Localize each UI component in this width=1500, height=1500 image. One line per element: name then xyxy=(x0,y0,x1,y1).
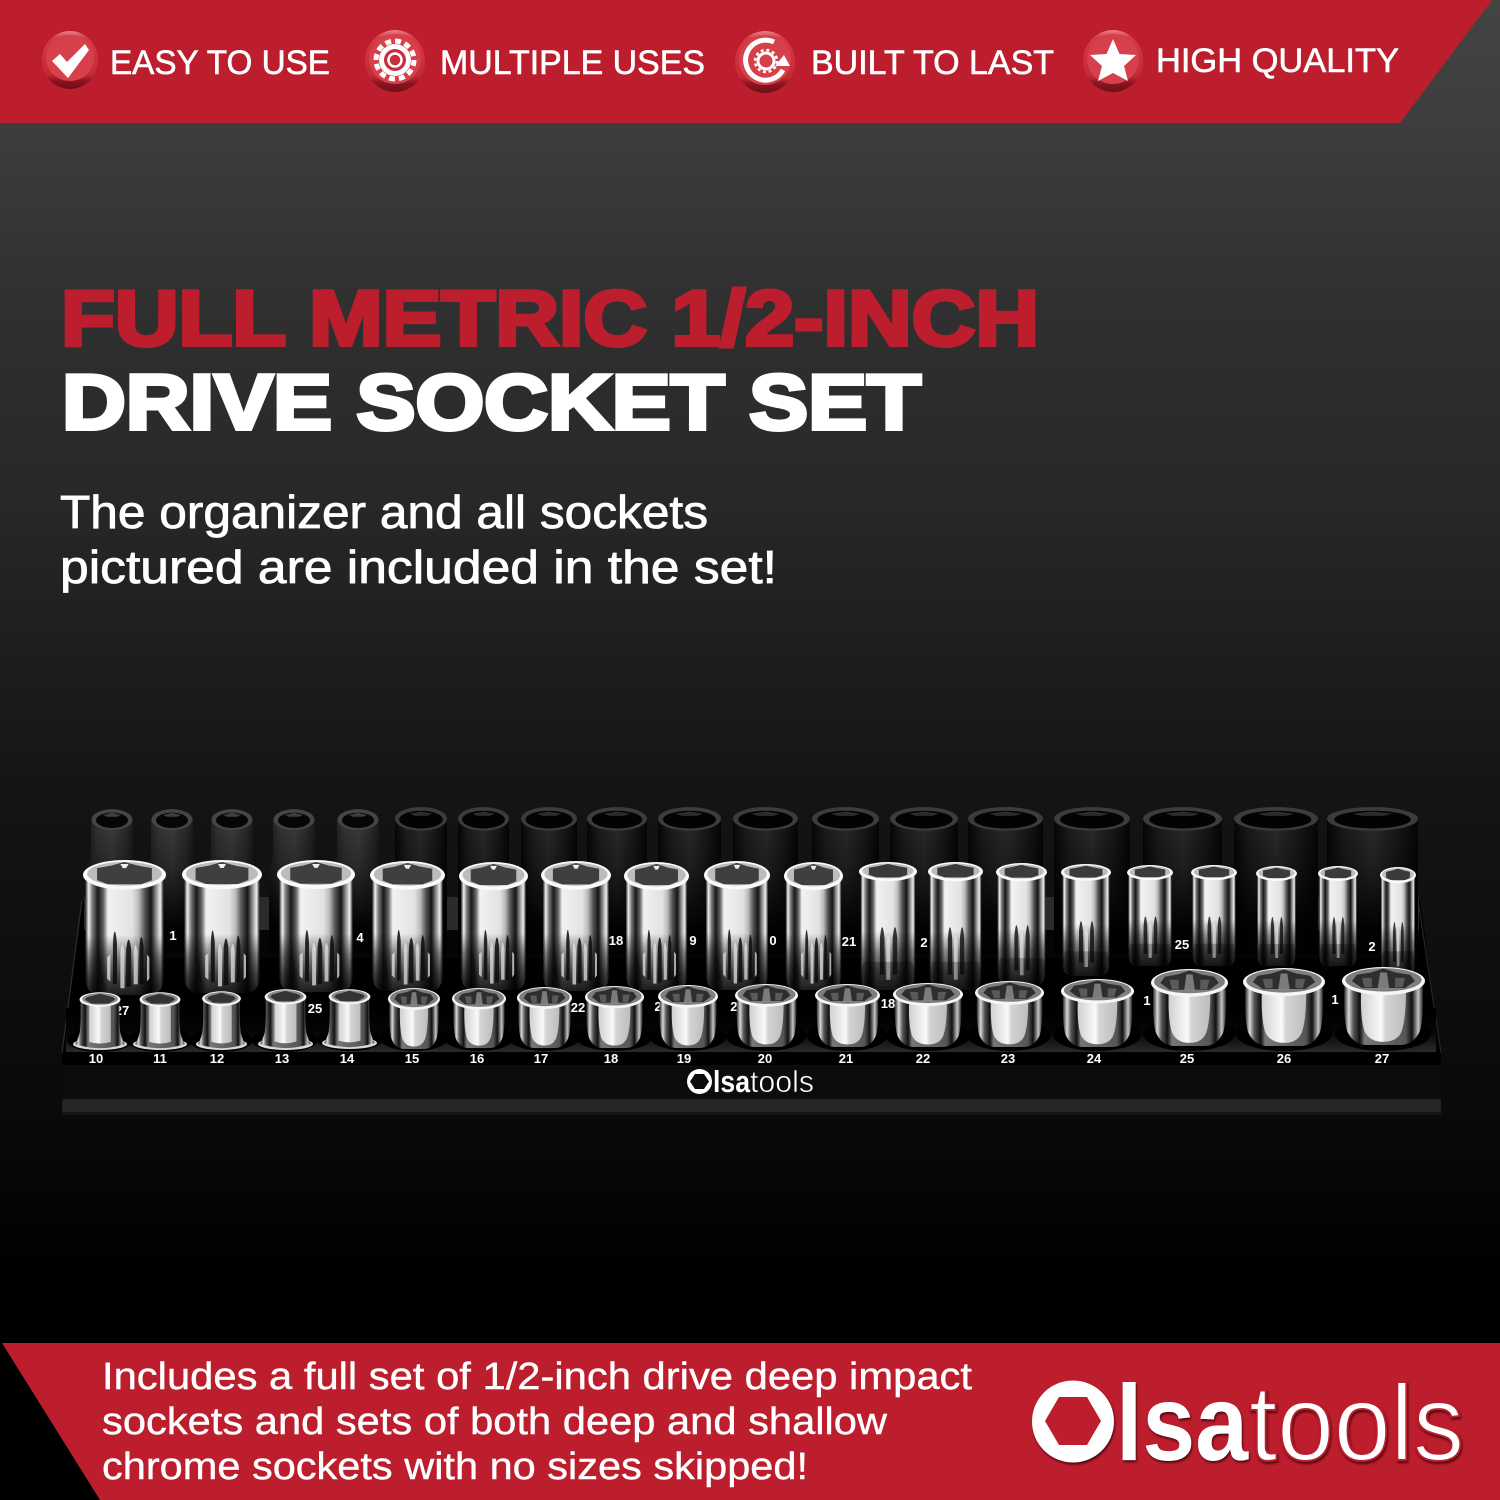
logo: Olsatools: O xyxy=(1046,1382,1100,1467)
size numbers on tray xyxy=(89,1051,1389,1066)
feature: high quality: HIGH QUALITY xyxy=(1156,42,1399,80)
tray logo: tools xyxy=(750,1064,814,1099)
size numbers on tray: 20 xyxy=(758,1051,772,1066)
description text: Includes a full set of 1/2-inch drive deep impact xyxy=(102,1356,972,1398)
feature: built to last: BUILT TO LAST xyxy=(811,44,1054,82)
socket holes xyxy=(67,1017,1431,1052)
size numbers on tray: 23 xyxy=(1001,1051,1015,1066)
organizer tray xyxy=(62,897,1441,1115)
size numbers on tray: 22 xyxy=(916,1051,930,1066)
front tier back labels: 22 xyxy=(571,1000,585,1015)
middle tier size labels: 0 xyxy=(769,933,777,948)
size numbers on tray: 11 xyxy=(153,1051,167,1066)
title xyxy=(61,274,1039,446)
front tier back labels: 18 xyxy=(881,996,895,1011)
top banner xyxy=(0,0,1492,123)
size numbers on tray: 12 xyxy=(210,1051,224,1066)
icon: star badge xyxy=(1083,30,1143,92)
icon: check badge xyxy=(42,31,98,89)
middle tier size labels xyxy=(169,928,1376,954)
front tier back labels: 1 xyxy=(1143,993,1151,1008)
title line 2: DRIVE SOCKET SET xyxy=(62,358,921,446)
middle tier size labels: 18 xyxy=(609,933,623,948)
size numbers on tray: 18 xyxy=(604,1051,618,1066)
title line 1: FULL METRIC 1/2-INCH xyxy=(61,274,1039,362)
shallow chrome sockets row xyxy=(73,967,1425,1050)
subtitle text: The organizer and all sockets xyxy=(60,486,708,538)
front tier back labels: 2 xyxy=(654,999,662,1014)
middle tier size labels: 2 xyxy=(1368,939,1376,954)
size numbers on tray: 16 xyxy=(470,1051,484,1066)
logo: Olsatools: lsa xyxy=(1116,1362,1249,1483)
middle tier size labels: 2 xyxy=(920,935,928,950)
tray logo: lsa xyxy=(713,1064,751,1099)
size numbers on tray: 27 xyxy=(1375,1051,1389,1066)
size numbers on tray: 21 xyxy=(839,1051,853,1066)
size numbers on tray: 10 xyxy=(89,1051,103,1066)
logo: Olsatools xyxy=(1032,1362,1464,1483)
middle tier size labels: 25 xyxy=(1175,937,1189,952)
front tier back labels: 27 xyxy=(115,1003,129,1018)
middle tier size labels: 9 xyxy=(689,933,697,948)
logo: Olsatools: tools xyxy=(1249,1362,1464,1483)
size numbers on tray: 19 xyxy=(677,1051,691,1066)
size numbers on tray: 14 xyxy=(340,1051,355,1066)
subtitle text: pictured are included in the set! xyxy=(60,541,777,593)
size numbers on tray: 25 xyxy=(1180,1051,1194,1066)
middle tier size labels: 1 xyxy=(169,928,177,943)
description text: chrome sockets with no sizes skipped! xyxy=(102,1446,808,1488)
middle tier size labels: 21 xyxy=(842,934,856,949)
icon: gear badge xyxy=(365,30,425,92)
deep impact sockets row xyxy=(87,807,1418,955)
tray logo xyxy=(687,1064,814,1099)
bottom banner xyxy=(2,1343,1500,1500)
icon: cycle gear badge xyxy=(735,31,795,93)
subtitle text xyxy=(60,486,777,593)
deep chrome sockets row xyxy=(83,860,1416,995)
front tier back labels: 25 xyxy=(308,1001,322,1016)
feature: multiple uses: MULTIPLE USES xyxy=(440,44,705,82)
front tier back labels: 1 xyxy=(1331,992,1339,1007)
feature: easy to use: EASY TO USE xyxy=(110,44,330,82)
size numbers on tray: 13 xyxy=(275,1051,289,1066)
front tier back labels xyxy=(115,992,1339,1018)
size numbers on tray: 24 xyxy=(1087,1051,1102,1066)
description text xyxy=(102,1356,972,1488)
tray logo: O xyxy=(690,1066,709,1096)
size numbers on tray: 15 xyxy=(405,1051,419,1066)
description text: sockets and sets of both deep and shallow xyxy=(102,1401,888,1443)
middle tier size labels: 4 xyxy=(356,930,364,945)
front tier back labels: 2 xyxy=(730,999,738,1014)
size numbers on tray: 26 xyxy=(1277,1051,1291,1066)
size numbers on tray: 17 xyxy=(534,1051,548,1066)
socket organizer with sockets xyxy=(62,807,1441,1115)
